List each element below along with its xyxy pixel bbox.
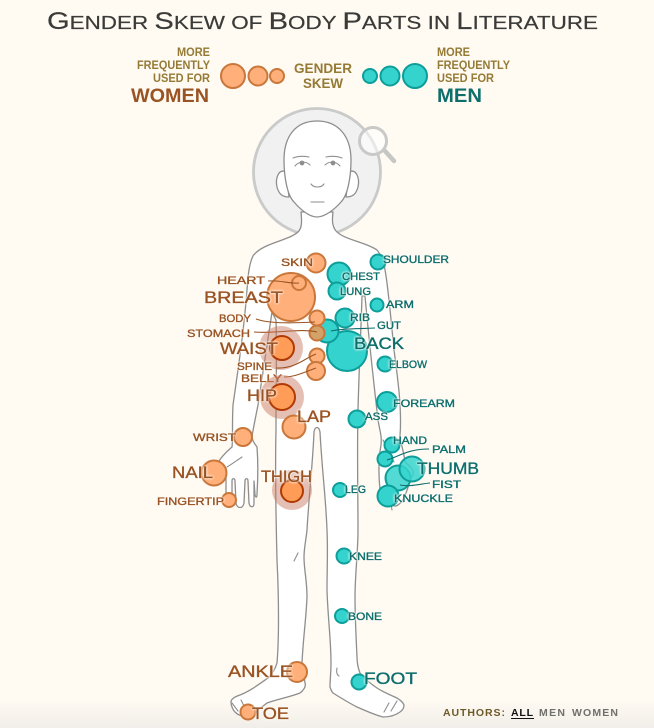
knee: [336, 548, 382, 564]
gut: GUT: [377, 320, 401, 332]
belly: BELLY: [241, 373, 283, 385]
lap: LAP: [297, 408, 331, 426]
eyebrows and eyes: [293, 156, 342, 166]
thigh: THIGH: [261, 468, 312, 486]
legend: men text: MEN: [437, 86, 482, 107]
nose: [311, 184, 324, 187]
forearm: [377, 392, 455, 412]
authors filter: [443, 707, 618, 719]
legend: centre label: [294, 61, 352, 91]
ass: [348, 410, 388, 428]
legend: women text: WOMEN: [131, 86, 209, 107]
authors filter: WOMEN: [572, 707, 618, 719]
legend: women text: MORE: [177, 45, 210, 59]
breast: [204, 273, 315, 321]
fist: FIST: [432, 479, 461, 491]
body creases: [227, 440, 397, 712]
waist: [220, 326, 303, 370]
chest: [328, 262, 380, 286]
nail: NAIL: [172, 464, 213, 482]
legend: men text: FREQUENTLY: [437, 58, 510, 72]
elbow: [378, 356, 428, 372]
knuckle: KNUCKLE: [394, 493, 453, 505]
knee: KNEE: [349, 551, 382, 563]
hip: HIP: [247, 387, 277, 405]
head: [276, 121, 359, 217]
heart: [217, 275, 306, 290]
lung: LUNG: [340, 286, 371, 298]
chest: CHEST: [342, 271, 380, 283]
thigh: [261, 468, 312, 510]
mouth: [311, 201, 324, 203]
fingertip: FINGERTIP: [157, 496, 224, 508]
authors filter: ALL: [511, 707, 534, 719]
stomach: STOMACH: [187, 328, 250, 340]
spine: [237, 348, 324, 373]
leg: [333, 483, 366, 497]
lap: [282, 408, 331, 438]
legend: centre label: GENDER: [294, 61, 352, 76]
forearm: FOREARM: [393, 398, 455, 410]
foot: FOOT: [364, 670, 417, 688]
legend: women text: USED FOR: [153, 71, 210, 85]
nail: [172, 460, 226, 486]
lung: [328, 282, 371, 300]
legend: men text: USED FOR: [437, 71, 494, 85]
wrist: [193, 428, 252, 446]
gut: [316, 320, 401, 342]
legend: women text: FREQUENTLY: [137, 58, 210, 72]
legend: men circles: [363, 64, 427, 88]
wrist: WRIST: [193, 432, 236, 444]
knuckle: [378, 486, 453, 506]
halo behind head: [254, 108, 380, 236]
fingertip: [157, 493, 236, 508]
palm: [378, 444, 466, 466]
rib: [336, 308, 370, 328]
face: [284, 121, 351, 217]
leg: LEG: [345, 484, 366, 496]
hand: HAND: [393, 435, 427, 447]
spine: SPINE: [237, 361, 272, 373]
thumb: THUMB: [417, 460, 479, 478]
stomach: [187, 326, 324, 340]
arm: ARM: [386, 299, 414, 311]
body: [219, 310, 324, 326]
legend: men text: MORE: [437, 45, 470, 59]
ankle: [228, 662, 307, 682]
skew marker: men: [316, 254, 479, 690]
palm: PALM: [432, 444, 466, 456]
breast: BREAST: [204, 289, 283, 307]
ankle: ANKLE: [228, 663, 293, 681]
authors filter: AUTHORS:: [443, 707, 505, 719]
rib: RIB: [350, 312, 370, 324]
skin: SKIN: [281, 257, 313, 269]
body figure: [216, 121, 413, 717]
waist: WAIST: [220, 340, 278, 358]
thumb: [400, 456, 479, 482]
hand: [384, 435, 427, 452]
foot: [352, 670, 417, 690]
legend: men text: [437, 45, 510, 107]
left ear: [276, 171, 289, 197]
toe: TOE: [252, 705, 289, 723]
body: BODY: [219, 313, 252, 325]
authors filter: MEN: [539, 707, 565, 719]
bone: BONE: [348, 611, 382, 623]
right ear: [346, 171, 359, 197]
toe: [240, 704, 289, 723]
legend: centre label: SKEW: [303, 76, 343, 91]
icon: magnifying glass: [360, 128, 394, 161]
heart: HEART: [217, 275, 265, 287]
legend: women circles: [221, 64, 284, 88]
back: BACK: [354, 335, 404, 353]
shoulder: SHOULDER: [383, 254, 449, 266]
ass: ASS: [365, 411, 388, 423]
fist: [386, 466, 461, 491]
arm: [370, 298, 414, 312]
body outline: [216, 212, 413, 717]
legend: women text: [131, 45, 210, 107]
back: [327, 331, 404, 371]
elbow: ELBOW: [389, 359, 428, 371]
bone: [335, 609, 382, 623]
hip: [247, 375, 304, 419]
shoulder: [370, 254, 449, 270]
legend: gender skew: [131, 45, 510, 107]
belly: [241, 362, 325, 385]
skew marker: women: [157, 254, 331, 723]
title: GENDER SKEW OF BODY PARTS IN LITERATURE: [47, 8, 598, 35]
skin: [281, 254, 326, 272]
